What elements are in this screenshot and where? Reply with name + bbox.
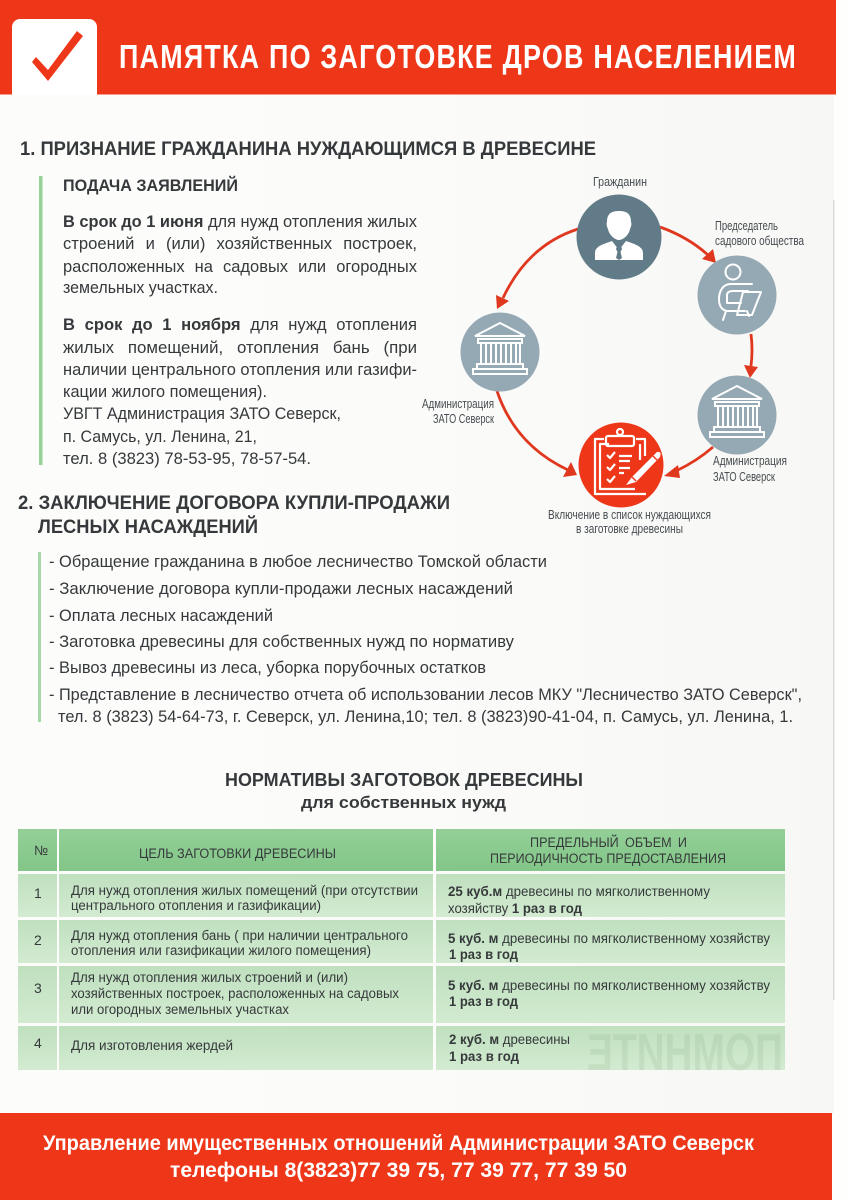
heading: section 2 [18,493,450,538]
heading: section 1: 1. ПРИЗНАНИЕ ГРАЖДАНИНА НУЖДАЮЩИМСЯ В ДРЕВЕСИНЕ [20,139,596,160]
text block: deadline 1 November: тел. 8 (3823) 78-53-95, 78-57-54. [63,450,311,468]
table row 1: 1 [34,885,42,901]
panel: steps list: - Заготовка древесины для собственных нужд по нормативу [49,633,515,651]
arrow: citizen to chairman [660,227,716,263]
text block: deadline 1 June: В срок до 1 июня для нужд отопления жилых [63,213,418,231]
table row 2: Для нужд отопления бань ( при наличии центрального [71,928,408,943]
header banner [0,0,836,94]
panel: steps list: тел. 8 (3823) 54-64-73, г. Северск, ул. Ленина,10; тел. 8 (3823)90-41-04, п. Самусь, ул. Ленина, 1. [58,708,793,726]
arrow: citizen to left administration [496,229,578,309]
table row 4: 4 [34,1035,42,1051]
table row 1 [18,874,785,917]
panel: submission of applications [39,176,418,468]
label: administration right: Администрация [713,454,787,468]
heading: section 2: ЛЕСНЫХ НАСАЖДЕНИЙ [38,516,258,538]
label: inclusion in the list: в заготовке древесины [576,522,683,536]
text block: deadline 1 June: земельных участках. [63,279,218,297]
panel: steps list: - Представление в лесничество отчета об использовании лесов МКУ "Лесничество ЗАТО Северск", [49,686,802,704]
table row 2: 2 [34,932,42,948]
text block: deadline 1 November: В срок до 1 ноября для нужд отопления [63,316,417,334]
table row 1: 25 куб.м древесины по мягколиственному [448,884,710,899]
icon: chairman [698,256,776,334]
label: administration left: Администрация [422,397,494,411]
heading: table title: для собственных нужд [301,793,506,812]
table row 1: хозяйству 1 раз в год [448,901,582,916]
table row 3: 3 [34,980,42,996]
label: chairman [715,219,804,248]
table row 2: 1 раз в год [449,947,518,962]
icon: administration left [460,312,540,392]
icon: clipboard list [578,422,664,508]
arrow: administration to list [664,447,713,478]
table row 3: хозяйственных построек, расположенных на садовых [71,986,399,1001]
table row 3 [18,966,785,1023]
label: inclusion in the list: Включение в список нуждающихся [548,508,711,522]
arrow: left administration to list [497,391,577,477]
text block: deadline 1 November: УВГТ Администрация ЗАТО Северск, [63,405,341,423]
table row 1: Для нужд отопления жилых помещений (при отсутствии [71,883,418,898]
icon: administration right [698,376,776,454]
text block: deadline 1 June: расположенных на садовых или огородных [63,258,418,276]
table row 3: 1 раз в год [449,994,518,1009]
table row 4 [18,1024,785,1082]
text block: deadline 1 November [63,316,417,468]
heading: table title [225,769,583,812]
table row 4: 1 раз в год [449,1049,519,1064]
heading: table title: НОРМАТИВЫ ЗАГОТОВОК ДРЕВЕСИНЫ [225,769,583,790]
show-through: mirrored word from the reverse side: ПОМНИТЕ [587,1024,783,1082]
footer banner: телефоны 8(3823)77 39 75, 77 39 77, 77 39 50 [170,1158,627,1182]
table header row: ПЕРИОДИЧНОСТЬ ПРЕДОСТАВЛЕНИЯ [490,851,726,866]
table row 2: 5 куб. м древесины по мягколиственному хозяйству [448,931,770,946]
table row 1: центрального отопления и газификации) [71,898,321,913]
flow diagram [422,175,804,536]
panel: steps list: - Обращение гражданина в любое лесничество Томской области [49,553,547,571]
label: administration left: ЗАТО Северск [433,412,494,426]
text block: deadline 1 June [63,213,418,297]
text block: deadline 1 November: наличии центрального отопления или газифи- [63,361,417,379]
table: wood norms [18,829,785,1082]
table row 4: Для изготовления жердей [71,1038,233,1053]
table header row: ЦЕЛЬ ЗАГОТОВКИ ДРЕВЕСИНЫ [139,846,336,861]
heading: section 2: 2. ЗАКЛЮЧЕНИЕ ДОГОВОРА КУПЛИ-ПРОДАЖИ [18,493,450,514]
label: administration right: ЗАТО Северск [713,470,775,484]
table row 3: 5 куб. м древесины по мягколиственному хозяйству [448,978,770,993]
label: inclusion in the list [548,508,711,536]
table header row: ПРЕДЕЛЬНЫЙ ОБЪЕМ И [530,835,687,850]
icon: check mark tab [12,19,97,94]
table row 2 [18,920,785,963]
icon: citizen [576,194,662,280]
table header row [18,829,785,871]
table row 3: Для нужд отопления жилых строений и (или) [71,970,348,985]
text block: deadline 1 November: кации жилого помещения). [63,383,267,401]
table row 2: отопления или газификации жилого помещения) [71,943,371,958]
text block: deadline 1 November: п. Самусь, ул. Ленина, 21, [63,428,257,446]
label: chairman: садового общества [715,234,804,248]
table row 4: 2 куб. м древесины [449,1032,570,1047]
panel: steps list: - Оплата лесных насаждений [49,607,273,625]
arrow: chairman to administration [744,334,758,378]
panel: steps list [38,552,802,726]
label: administration left [422,397,494,426]
table row 3: или огородных земельных участках [71,1002,289,1017]
label: chairman: Председатель [715,219,778,233]
text block: deadline 1 June: строений и (или) хозяйственных построек, [63,235,417,253]
panel: steps list: - Заключение договора купли-продажи лесных насаждений [49,580,513,598]
label: administration right [713,454,787,484]
footer banner: Управление имущественных отношений Администрации ЗАТО Северск [43,1131,754,1155]
footer banner [0,1113,832,1200]
panel: steps list: - Вывоз древесины из леса, уборка порубочных остатков [49,659,486,677]
table header row: № [34,843,48,858]
label: citizen: Гражданин [593,175,647,189]
text block: deadline 1 November: жилых помещений, отопления бань (при [63,339,417,357]
subheading: applications: ПОДАЧА ЗАЯВЛЕНИЙ [63,176,238,195]
